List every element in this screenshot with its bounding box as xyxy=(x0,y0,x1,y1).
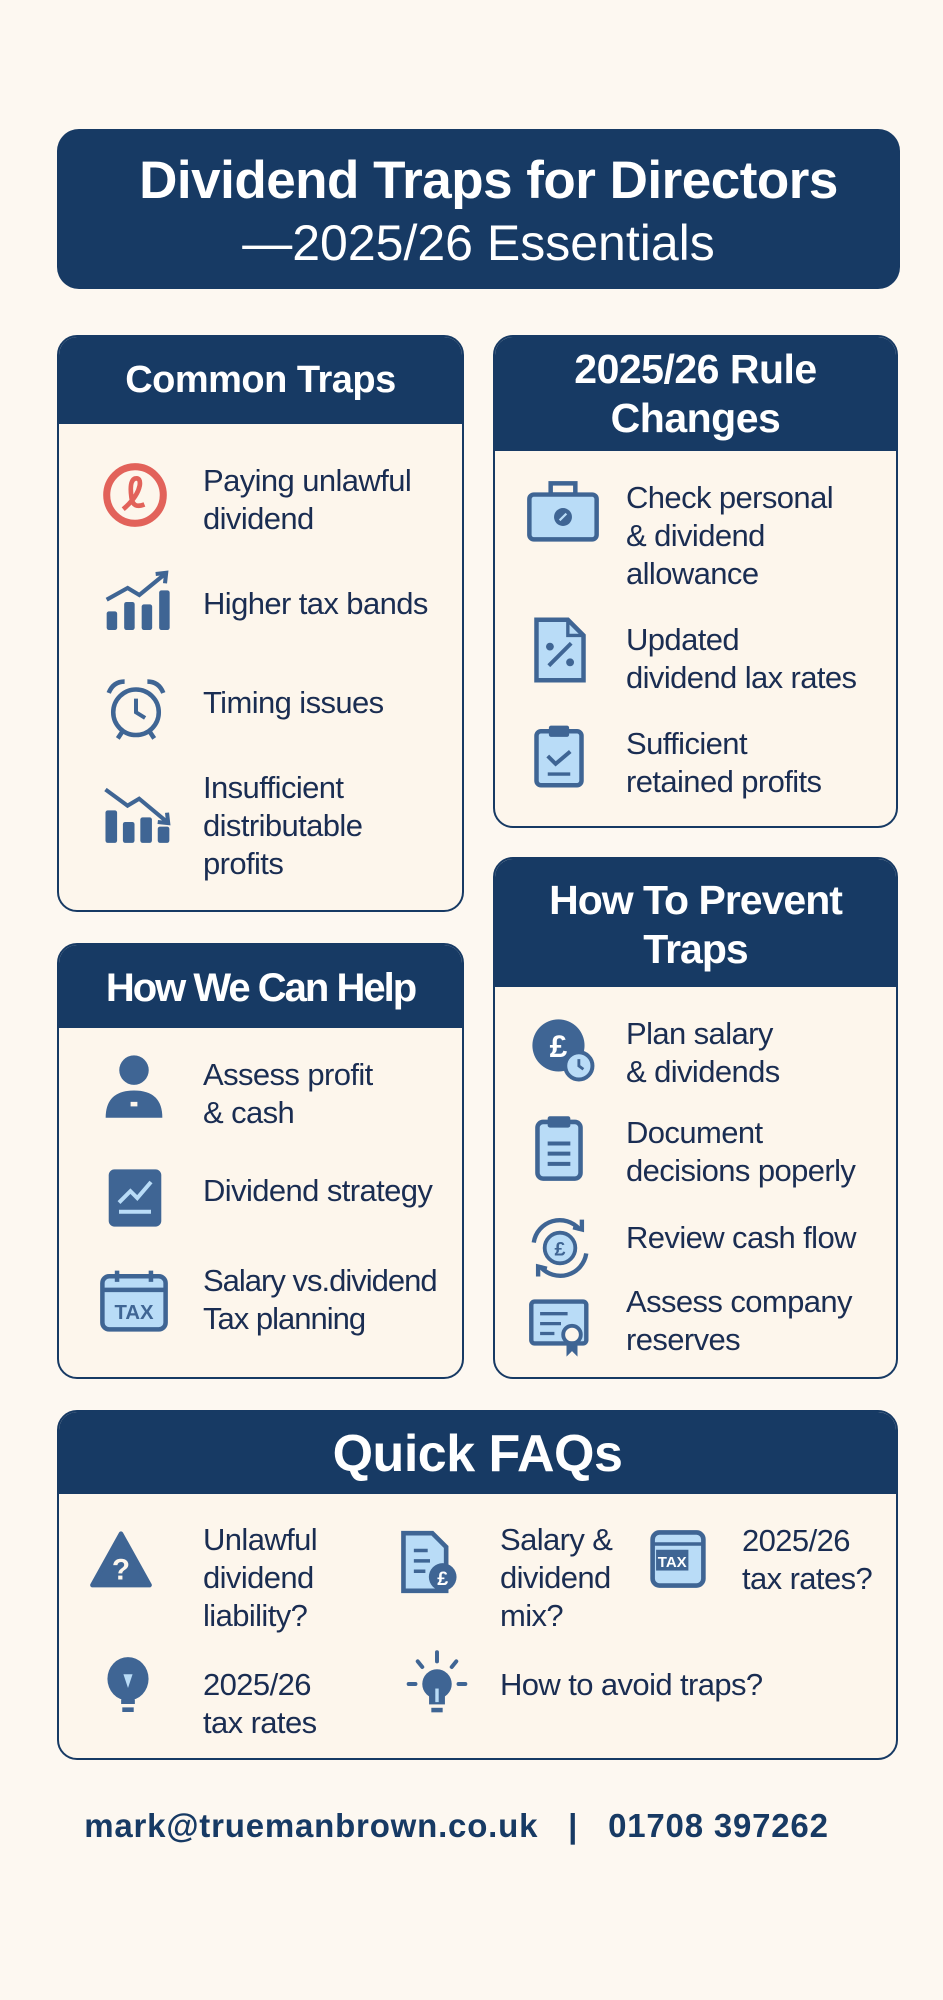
icon: tax calendar xyxy=(100,1270,168,1332)
icon: lightbulb xyxy=(406,1650,468,1712)
text: paying unlawful dividend xyxy=(203,463,411,536)
text: assess profit and cash: & cash xyxy=(203,1095,294,1130)
text: check personal allowance: allowance xyxy=(626,556,758,591)
text: insufficient distributable profits: distributable xyxy=(203,808,362,843)
icon: certificate xyxy=(529,1299,588,1356)
heading: quick faqs: Quick FAQs xyxy=(333,1425,622,1483)
text: paying unlawful dividend: dividend xyxy=(203,501,314,536)
icon: percent document xyxy=(534,618,586,682)
text: sufficient retained profits: Sufficient xyxy=(626,726,747,761)
heading: how to prevent traps: Traps xyxy=(643,926,748,972)
text: assess company reserves: reserves xyxy=(626,1322,740,1357)
text: review cash flow: Review cash flow xyxy=(626,1220,856,1255)
text: updated dividend tax rates: Updated xyxy=(626,622,739,657)
text: updated dividend tax rates: dividend lax rates xyxy=(626,660,856,695)
icon: warning question xyxy=(90,1531,152,1588)
text: 2025/26 tax rates xyxy=(203,1667,316,1740)
panel: how to prevent traps xyxy=(493,857,898,1379)
title: —2025/26 Essentials xyxy=(242,215,715,271)
panel: quick faqs xyxy=(57,1410,898,1760)
text: how to avoid traps: How to avoid traps? xyxy=(500,1667,763,1702)
text: document decisions: decisions poperly xyxy=(626,1153,855,1188)
panel: how we can help xyxy=(57,943,464,1379)
text: 2025/26 tax rates question: tax rates? xyxy=(742,1561,872,1596)
text: higher tax bands: Higher tax bands xyxy=(203,586,428,621)
text: unlawful dividend liability: liability? xyxy=(203,1598,307,1633)
icon: pound clock: £ xyxy=(550,1028,568,1064)
text: check personal allowance: & dividend xyxy=(626,518,765,553)
icon: cash flow cycle xyxy=(532,1218,588,1278)
icon: declining chart xyxy=(104,788,170,843)
text: unlawful dividend liability: Unlawful xyxy=(203,1522,317,1557)
text: 2025/26 tax rates question: 2025/26 xyxy=(742,1523,850,1558)
text: sufficient retained profits xyxy=(626,726,821,799)
text: salary and dividend mix: mix? xyxy=(500,1598,563,1633)
icon: document pound xyxy=(401,1530,456,1594)
heading: common traps xyxy=(59,337,462,424)
text: unlawful dividend liability: dividend xyxy=(203,1560,314,1595)
title xyxy=(57,129,900,289)
panel: common traps xyxy=(57,335,464,912)
text: assess company reserves xyxy=(626,1284,852,1357)
heading: how to prevent traps xyxy=(495,859,896,987)
icon: bar chart up xyxy=(106,570,170,630)
heading: common traps: Common Traps xyxy=(125,359,396,401)
text: salary vs dividend tax planning: Tax planning xyxy=(203,1301,365,1336)
heading: how we can help: How We Can Help xyxy=(106,966,415,1010)
text: plan salary and dividends: Plan salary xyxy=(626,1016,773,1051)
text: 2025/26 tax rates: tax rates xyxy=(203,1705,316,1740)
text: check personal allowance: Check personal xyxy=(626,480,833,515)
heading: rule changes: Changes xyxy=(611,395,780,441)
icon: briefcase xyxy=(527,481,599,542)
text: document decisions xyxy=(626,1115,856,1188)
text: 2025/26 tax rates: 2025/26 xyxy=(203,1667,311,1702)
text: dividend strategy: Dividend strategy xyxy=(203,1173,432,1208)
icon: warning question: ? xyxy=(112,1553,130,1586)
icon: tax window xyxy=(650,1530,706,1588)
text: timing issues: Timing issues xyxy=(203,685,384,720)
text: salary and dividend mix: dividend xyxy=(500,1560,611,1595)
text: updated dividend tax rates xyxy=(626,622,856,695)
text: unlawful dividend liability xyxy=(203,1522,317,1633)
text: assess company reserves: Assess company xyxy=(626,1284,852,1319)
icon: unlawful pound xyxy=(103,463,167,527)
icon: cash flow cycle: £ xyxy=(555,1239,566,1261)
text: assess profit and cash xyxy=(203,1057,373,1130)
text: insufficient distributable profits: Insufficient xyxy=(203,770,343,805)
icon: clipboard check xyxy=(534,726,584,788)
text: salary vs dividend tax planning xyxy=(203,1263,437,1336)
heading: quick faqs xyxy=(59,1412,896,1494)
text: paying unlawful dividend: Paying unlawful xyxy=(203,463,411,498)
text: plan salary and dividends: & dividends xyxy=(626,1054,780,1089)
icon: bulb dark xyxy=(107,1657,149,1712)
icon: document xyxy=(535,1116,583,1181)
footer: contact: mark@truemanbrown.co.uk | 01708 397262 xyxy=(84,1807,829,1844)
text: plan salary and dividends xyxy=(626,1016,780,1089)
heading: how to prevent traps: How To Prevent xyxy=(549,877,842,923)
icon: strategy chart xyxy=(108,1169,162,1227)
icon: tax window: TAX xyxy=(658,1554,687,1571)
panel: rule changes xyxy=(493,335,898,828)
heading: rule changes xyxy=(495,337,896,451)
text: insufficient distributable profits xyxy=(203,770,362,881)
icon: person xyxy=(106,1055,162,1118)
text: 2025/26 tax rates question xyxy=(742,1523,872,1596)
text: salary and dividend mix xyxy=(500,1522,612,1633)
title: Dividend Traps for Directors xyxy=(139,151,838,210)
text: insufficient distributable profits: profits xyxy=(203,846,283,881)
text: salary vs dividend tax planning: Salary vs.dividend xyxy=(203,1263,437,1298)
text: assess profit and cash: Assess profit xyxy=(203,1057,373,1092)
icon: alarm clock xyxy=(106,679,166,740)
text: check personal allowance xyxy=(626,480,833,591)
text: salary and dividend mix: Salary & xyxy=(500,1522,612,1557)
heading: rule changes: 2025/26 Rule xyxy=(574,346,817,392)
heading: how we can help xyxy=(59,945,462,1028)
icon: tax calendar: TAX xyxy=(114,1302,154,1324)
icon: pound clock xyxy=(532,1019,594,1082)
text: sufficient retained profits: retained profits xyxy=(626,764,821,799)
icon: document pound: £ xyxy=(437,1568,448,1590)
text: document decisions: Document xyxy=(626,1115,762,1150)
